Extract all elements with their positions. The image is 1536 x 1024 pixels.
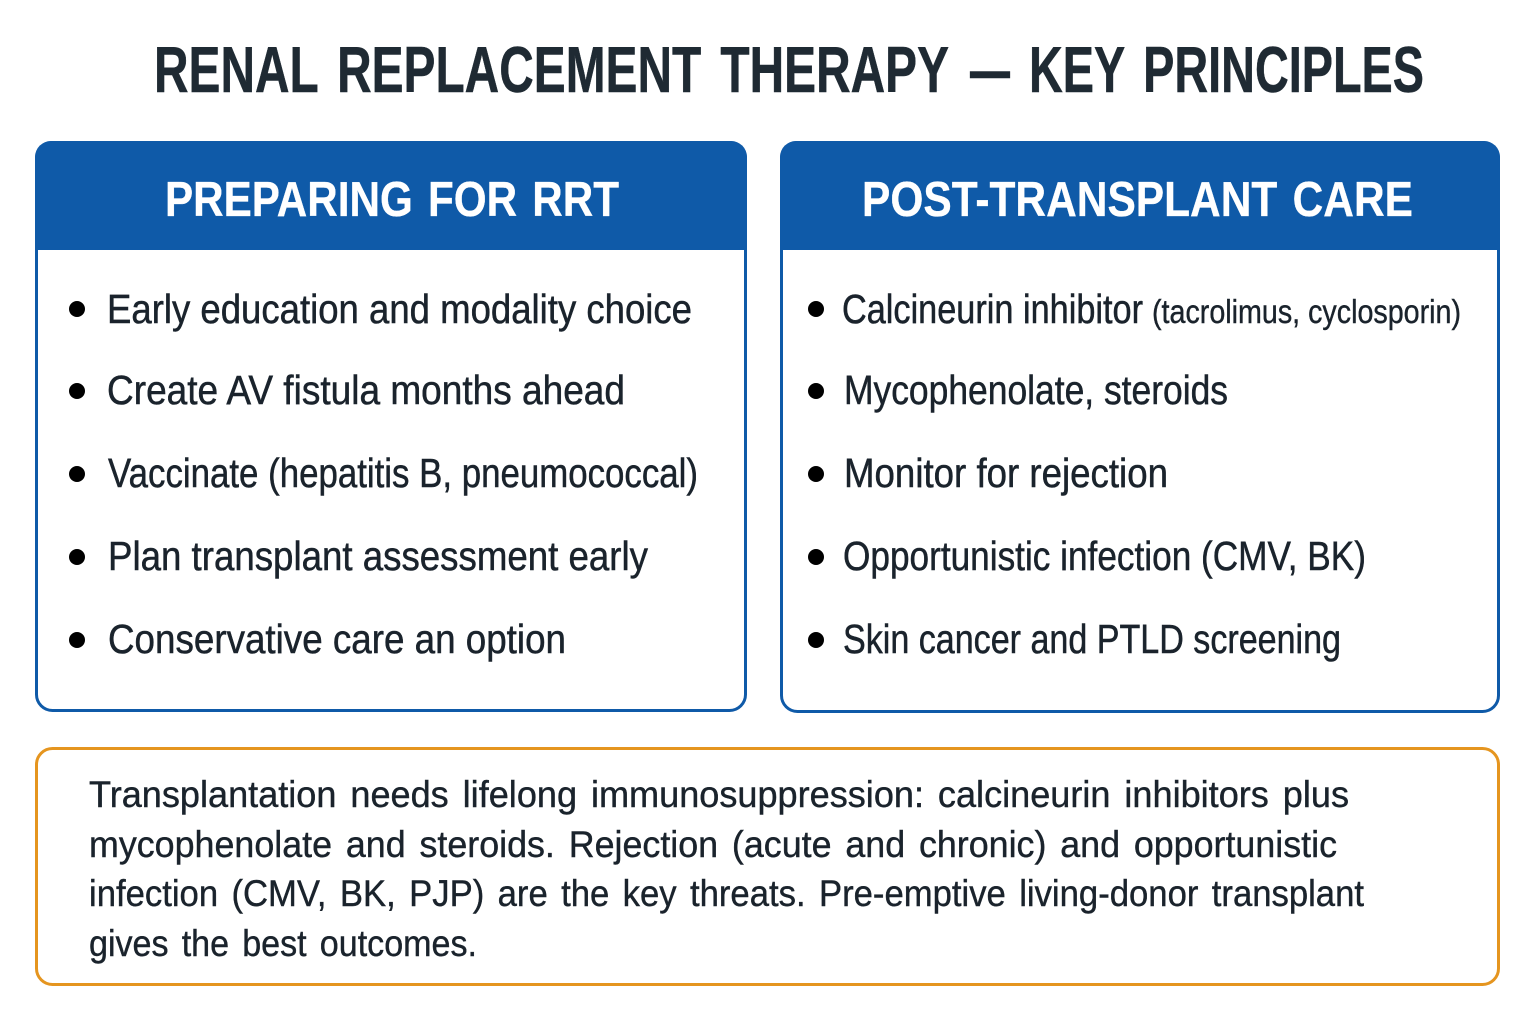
list item: calcineurin inhibitor: Calcineurin inhibitor — [842, 286, 1143, 332]
list item: skin cancer: Skin cancer and PTLD screening — [843, 616, 1341, 662]
callout: summary: Transplantation needs lifelong immunosuppression: calcineurin inhibitors plus — [89, 774, 1349, 815]
list item: calcineurin inhibitor — [808, 286, 1461, 332]
callout: summary: infection (CMV, BK, PJP) are the key threats. Pre-emptive living-donor transplant — [89, 873, 1365, 914]
panel: post-transplant care — [780, 141, 1500, 712]
panel header: preparing for RRT: PREPARING FOR RRT — [165, 173, 619, 227]
panel header: post-transplant care — [780, 141, 1500, 250]
callout: summary: gives the best outcomes. — [89, 923, 477, 964]
title: — — [970, 33, 1010, 106]
list item: education: Early education and modality choice — [107, 286, 692, 332]
list item: mycophenolate: Mycophenolate, steroids — [844, 367, 1228, 413]
panel: preparing for RRT — [35, 141, 747, 710]
list item: AV fistula: Create AV fistula months ahead — [107, 367, 625, 413]
list item: opportunistic infection: Opportunistic infection (CMV, BK) — [843, 533, 1366, 579]
panel header: post-transplant care: POST-TRANSPLANT CARE — [862, 173, 1413, 227]
callout: summary — [36, 748, 1498, 984]
panel header: preparing for RRT — [35, 141, 747, 250]
list item: vaccinate: Vaccinate (hepatitis B, pneumococcal) — [108, 450, 698, 496]
list item: conservative care: Conservative care an option — [108, 616, 566, 662]
list item: transplant assessment: Plan transplant assessment early — [108, 533, 648, 579]
callout: summary: mycophenolate and steroids. Rejection (acute and chronic) and opportunistic — [89, 824, 1337, 865]
list item: monitor for rejection: Monitor for rejection — [844, 450, 1168, 496]
list item: calcineurin inhibitor: (tacrolimus, cyclosporin) — [1152, 293, 1461, 330]
title: RENAL REPLACEMENT THERAPY — [154, 33, 949, 106]
